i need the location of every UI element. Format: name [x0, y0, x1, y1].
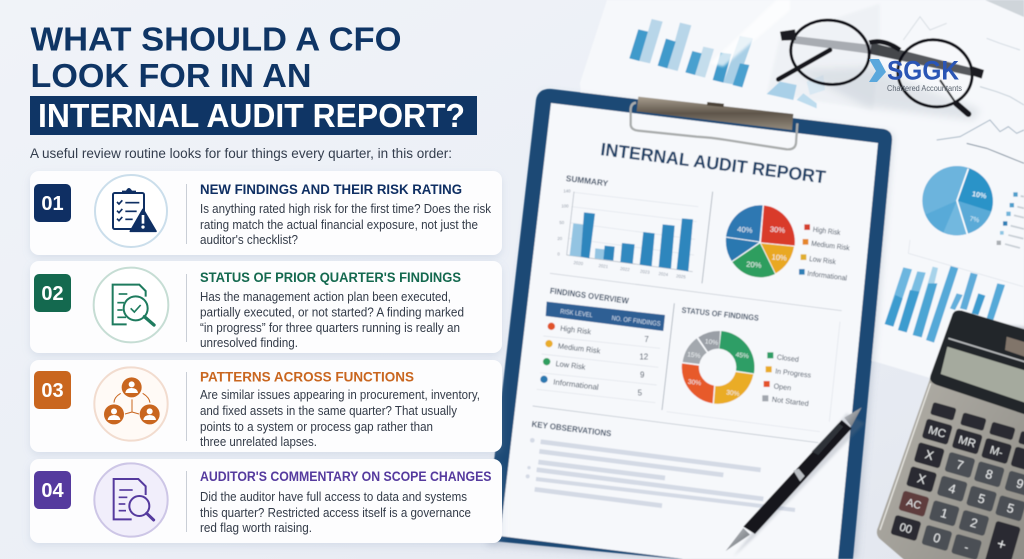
calculator keys: X: [923, 447, 936, 463]
summary heading: SUMMARY: [565, 173, 609, 188]
report lower section: [526, 285, 865, 557]
clipboard: [486, 89, 892, 559]
back sheet with charts: [580, 0, 1024, 400]
logo: SGGK: [869, 56, 962, 93]
body text: “in progress” for three quarters running is really an: [200, 321, 460, 335]
body text: [200, 388, 480, 449]
icon: connected people: [94, 367, 168, 441]
risk legend: Medium Risk: [811, 239, 851, 252]
risk pie chart: 10%: [771, 252, 787, 263]
heading: STATUS OF PRIOR QUARTER'S FINDINGS: [200, 270, 461, 285]
bottom blue bar chart: [885, 240, 1023, 343]
calculator keys: +: [995, 535, 1008, 554]
body text: three unrelated lapses.: [200, 435, 317, 449]
calculator keys: -: [963, 540, 970, 555]
body text: partially executed, or not started? A finding marked: [200, 306, 464, 320]
panel: card 02 prior quarter status: [30, 261, 502, 353]
body text: auditor's checklist?: [200, 233, 298, 247]
badge 01: [34, 184, 71, 222]
line charts: [937, 38, 1024, 163]
findings table: 9: [640, 370, 645, 379]
title: [30, 20, 477, 135]
status donut chart: 30%: [726, 389, 740, 398]
findings overview heading: FINDINGS OVERVIEW: [549, 285, 629, 306]
findings table: Informational: [553, 377, 599, 392]
panel: card 03 patterns across functions: [30, 360, 502, 452]
panel: card 04 scope changes: [30, 459, 502, 543]
body text: this quarter? Restricted access itself is a governance: [200, 506, 471, 520]
findings table: 12: [639, 352, 649, 361]
icon: document with magnifier and check: [94, 268, 168, 342]
risk pie chart: 30%: [769, 225, 786, 235]
blue pie chart: 7%: [969, 216, 980, 224]
body text: red flag worth raising.: [200, 521, 312, 535]
calculator keys: M-: [988, 444, 1005, 460]
body text: and fixed assets in the same quarter? That usually: [200, 404, 458, 418]
body text: [200, 490, 471, 535]
risk legend: Low Risk: [809, 254, 837, 266]
clipboard shadow: [487, 92, 892, 559]
report title: INTERNAL AUDIT REPORT: [599, 139, 827, 187]
calculator keys: MR: [957, 434, 977, 450]
calculator keys: AC: [905, 496, 923, 512]
risk pie chart: [726, 205, 795, 277]
calculator: [877, 310, 1024, 559]
title: LOOK FOR IN AN: [30, 57, 312, 94]
calculator keys: 4: [947, 481, 957, 497]
body text: [200, 290, 464, 350]
status donut chart: 30%: [687, 379, 702, 387]
key observations heading: KEY OBSERVATIONS: [531, 419, 612, 438]
body text: Has the management action plan been executed,: [200, 290, 451, 304]
findings table: 5: [638, 388, 643, 397]
summary bar chart: 20: [557, 236, 563, 241]
panel: card 01 new findings: [30, 171, 502, 255]
calculator keys: 8: [984, 467, 994, 482]
findings table: NO. OF FINDINGS: [611, 315, 661, 328]
status donut chart: 45%: [735, 352, 749, 360]
faded chart behind glasses: [767, 3, 947, 110]
calculator keys: 1: [939, 506, 949, 521]
top bar chart: [629, 0, 790, 87]
summary bar chart: 2025: [676, 273, 687, 280]
calculator keys: 00: [898, 521, 913, 536]
summary bar chart: [557, 189, 698, 280]
summary bar chart: 2024: [658, 271, 669, 277]
findings table: High Risk: [560, 324, 592, 336]
glasses: [778, 15, 984, 120]
body text: Are similar issues appearing in procurement, inventory,: [200, 388, 480, 402]
status of findings heading: STATUS OF FINDINGS: [681, 306, 760, 323]
risk legend: High Risk: [812, 225, 841, 237]
logo: SGGK: SGGK: [887, 56, 959, 86]
icon: document with magnifier: [94, 463, 168, 537]
badge 01: 01: [41, 193, 64, 215]
title: WHAT SHOULD A CFO: [30, 20, 402, 58]
body text: rating match the actual financial exposure, not just the: [200, 218, 478, 232]
body text: Did the auditor have full access to data and systems: [200, 490, 467, 504]
intro text: A useful review routine looks for four things every quarter, in this order:: [30, 146, 452, 161]
badge 02: 02: [41, 283, 64, 305]
calculator keys: 7: [954, 458, 965, 473]
badge 02: [34, 274, 71, 312]
blue legend: [997, 192, 1024, 248]
body text: unresolved finding.: [200, 336, 298, 350]
status donut chart: 15%: [687, 351, 701, 360]
calculator keys: MC: [927, 424, 947, 441]
risk legend: Informational: [807, 269, 848, 283]
calculator keys: 2: [968, 516, 979, 531]
observation placeholder lines: [526, 438, 795, 510]
risk pie chart: 40%: [737, 225, 753, 235]
findings table: [537, 302, 665, 403]
calculator keys: 5: [976, 491, 987, 507]
body text: Is anything rated high risk for the first time? Does the risk: [200, 202, 492, 216]
status legend: Open: [773, 381, 792, 392]
badge 03: [34, 371, 71, 409]
badge 04: [34, 471, 71, 509]
heading: AUDITOR'S COMMENTARY ON SCOPE CHANGES: [200, 469, 492, 484]
blue pie chart: [922, 166, 993, 235]
blue pie chart: 10%: [971, 189, 988, 201]
findings table: Medium Risk: [557, 341, 601, 356]
summary bar chart: 2023: [640, 269, 651, 275]
body text: points to a system or process gap rather than: [200, 420, 433, 434]
calculator keys: 5: [1005, 501, 1016, 516]
calculator keys: [890, 402, 1024, 559]
section divider: [702, 192, 713, 283]
pen: [726, 407, 865, 557]
summary bar chart: 0: [557, 252, 560, 257]
summary bar chart: 50: [559, 220, 565, 225]
findings table: Low Risk: [555, 359, 586, 372]
summary bar chart: 2020: [573, 260, 584, 266]
summary bar chart: 100: [561, 204, 569, 209]
calculator keys: X: [916, 471, 928, 487]
summary bar chart: 2022: [620, 266, 631, 272]
report upper section: [550, 139, 851, 311]
summary bar chart: 140: [563, 189, 571, 194]
status legend: [762, 352, 812, 408]
report page: [500, 103, 878, 559]
findings table: RISK LEVEL: [560, 308, 593, 319]
title highlight band: INTERNAL AUDIT REPORT?: [38, 97, 465, 134]
badge 03: 03: [41, 380, 64, 402]
risk legend: [799, 224, 851, 283]
badge 04: 04: [41, 480, 64, 502]
findings table: 7: [644, 335, 649, 344]
status donut chart: 10%: [704, 338, 719, 347]
risk pie chart: 20%: [746, 260, 762, 270]
body text: [200, 202, 492, 247]
icon: clipboard with warning: [95, 175, 167, 247]
status legend: Not Started: [771, 395, 809, 408]
logo: SGGK: Chartered Accountants: [887, 84, 962, 93]
status donut chart: [682, 331, 755, 404]
desk scene photo: [486, 0, 1024, 559]
status legend: Closed: [776, 352, 799, 364]
clipboard metal clip: [631, 97, 797, 149]
heading: PATTERNS ACROSS FUNCTIONS: [200, 370, 414, 384]
calculator keys: 0: [931, 531, 942, 546]
status legend: In Progress: [775, 366, 812, 380]
heading: NEW FINDINGS AND THEIR RISK RATING: [200, 182, 462, 197]
summary bar chart: 2021: [598, 263, 609, 269]
